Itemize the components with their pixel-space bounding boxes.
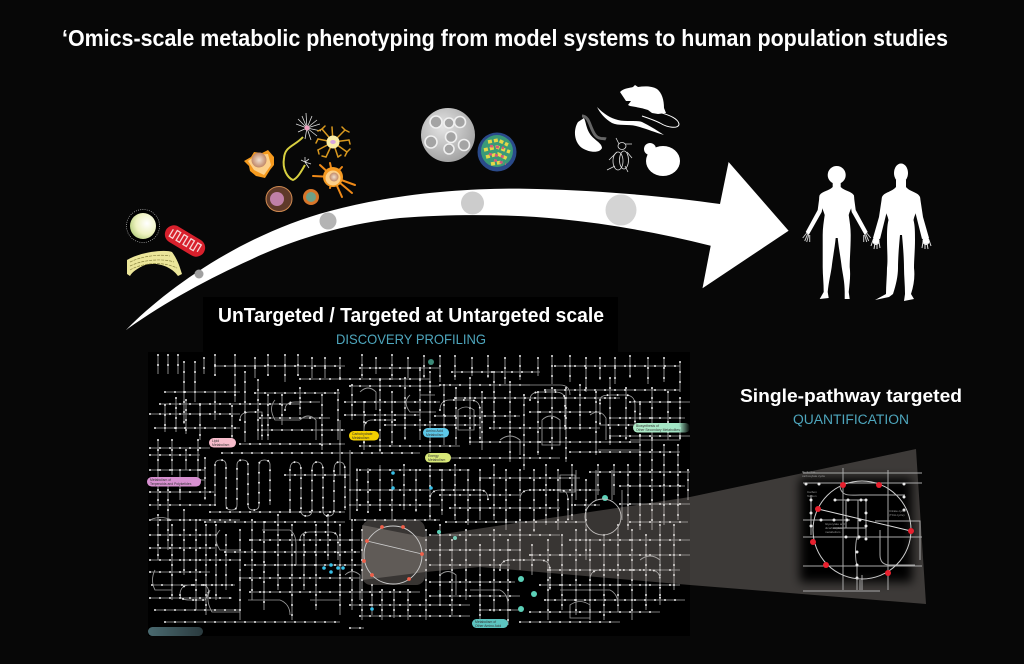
detail pathway nodes: [806, 484, 904, 590]
detail pathway labels: Citrate cycle: [889, 509, 906, 513]
icon: male human silhouette: [871, 164, 931, 301]
pathway label: carbohydrate metabolism: [349, 431, 379, 440]
scale marker 3: [461, 192, 484, 214]
subheading: discovery profiling: DISCOVERY PROFILING: [336, 331, 486, 347]
scale marker 1: [194, 270, 204, 278]
pathway label: amino acid metabolism: Amino Acid: [426, 429, 443, 433]
detail pathway labels: carboxylate cycle: [802, 474, 825, 478]
pathway label: other amino acids: Metabolism of: [475, 620, 496, 624]
panel: discovery profiling heading: [203, 297, 618, 353]
pathway label: energy metabolism: Energy: [428, 454, 439, 458]
teal highlighted nodes: [428, 359, 608, 612]
teal pathway ring: [585, 499, 621, 535]
detail pathway labels: Glyoxylate and: [825, 522, 845, 526]
subheading: quantification: QUANTIFICATION: [793, 412, 909, 427]
panel: metabolic pathway map: [147, 352, 690, 636]
highlighted pathway in map: [362, 520, 425, 585]
pathway label: amino acid metabolism: Metabolism: [426, 433, 444, 437]
pathway label: bottom left: [148, 627, 203, 636]
pathway label: secondary metabolites: Biosynthesis of: [636, 424, 659, 428]
pathway label: terpenoids and polyketides: Terpenoids and Polyketides: [150, 482, 192, 486]
detail pathway labels: fixation: [807, 494, 817, 498]
pathway lines secondary: [150, 385, 680, 618]
pathway label: lipid metabolism: Metabolism: [212, 443, 230, 447]
pathway label: secondary metabolites: Other Secondary Metabolites: [636, 428, 680, 432]
icons: human cell types: [244, 113, 355, 212]
detail pathway labels: Reductive: [802, 470, 816, 474]
pathway label: carbohydrate metabolism: Carbohydrate: [352, 432, 373, 436]
icons: organelles: [126, 210, 208, 276]
detail pathway labels: dicarboxylate: [825, 526, 843, 530]
detail pathway labels: [802, 470, 906, 534]
detail pathway labels: (TCA cycle): [889, 513, 905, 517]
pathway label: terpenoids and polyketides: [147, 477, 201, 486]
zoom beam from map to single pathway: [362, 449, 926, 604]
panel: single pathway detail: [800, 468, 922, 591]
icon: female human silhouette: [803, 166, 871, 299]
scale marker 4: [606, 194, 636, 226]
red pathway nodes: [810, 482, 914, 576]
heading: untargeted: UnTargeted / Targeted at Untargeted scale: [218, 305, 604, 327]
pathway ring: [813, 481, 911, 579]
pathway nodes: [150, 355, 690, 628]
title: ‘Omics-scale metabolic phenotyping from model systems to human population studies: [62, 25, 948, 51]
icons: spheroid and organoid: [421, 108, 516, 172]
pathway label: lipid metabolism: Lipid: [212, 439, 219, 443]
pathway label: energy metabolism: [425, 453, 451, 462]
pathway label: energy metabolism: Metabolism: [428, 458, 446, 462]
pathway label: other amino acids: [472, 619, 508, 628]
detail pathway labels: Carbon: [807, 490, 817, 494]
heading: single-pathway targeted: Single-pathway targeted: [740, 385, 962, 406]
scale marker 2: [320, 212, 336, 230]
detail pathway lines: [803, 468, 922, 591]
pathway label: lipid metabolism: [209, 438, 236, 448]
pathway lines: [150, 355, 690, 628]
pathway label: other amino acids: Other Amino Acid: [475, 624, 501, 628]
curved progression arrow: [126, 162, 789, 330]
pathway label: carbohydrate metabolism: Metabolism: [352, 436, 370, 440]
red pathway nodes in map: [362, 525, 424, 581]
icons: model organisms: [575, 85, 680, 176]
pathway label: terpenoids and polyketides: Metabolism of: [150, 478, 171, 482]
pathway label: amino acid metabolism: [423, 428, 449, 438]
detail pathway labels: metabolism: [825, 530, 841, 534]
pathway label: secondary metabolites: [633, 423, 690, 432]
blue highlighted nodes: [322, 471, 433, 611]
